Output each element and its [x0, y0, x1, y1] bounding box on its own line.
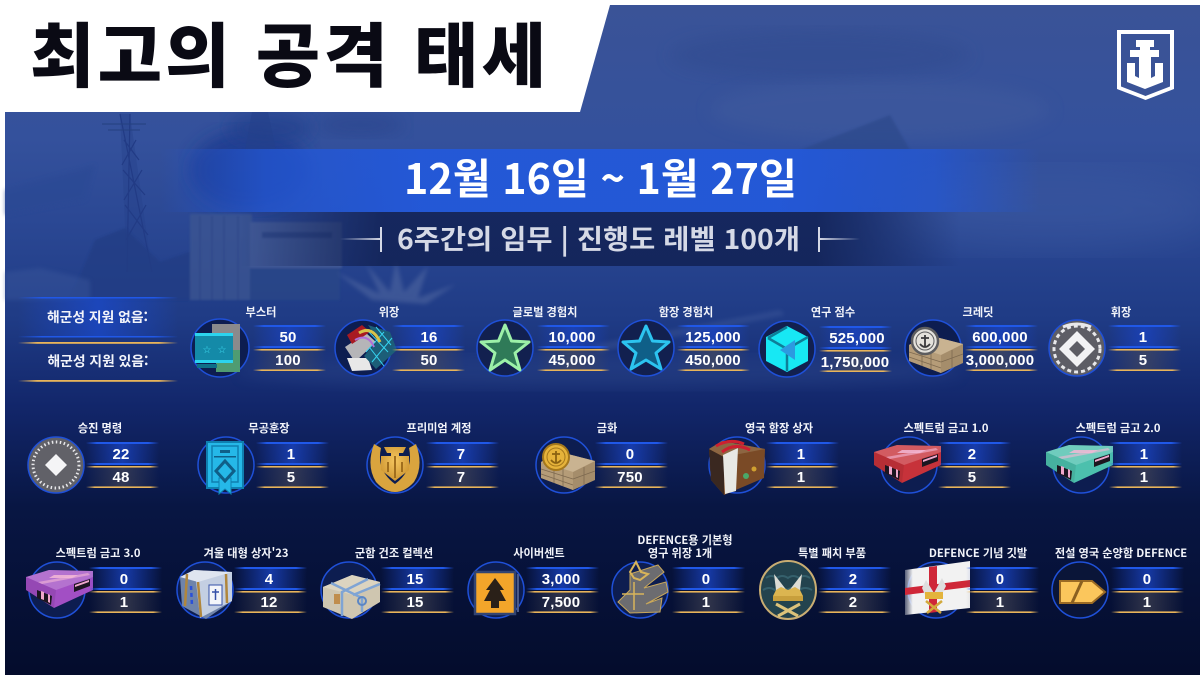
item: booster: [191, 304, 326, 377]
item: research points: 연구 점수: [811, 304, 855, 320]
ship silhouette: [5, 112, 456, 304]
item: camouflage: 16: [420, 329, 438, 346]
item: commendation medal: [198, 420, 329, 494]
item: spectrum container 2.0: 1: [1140, 469, 1148, 486]
item: commendation medal: 5: [287, 469, 295, 486]
item: camouflage: 50: [420, 352, 438, 369]
item: cybercents: 3,000: [542, 571, 580, 588]
item: commendation medal: 1: [287, 446, 295, 463]
item: legendary british cruiser defence: 전설 영국 순양함 DEFENCE: [1055, 545, 1187, 561]
item: commendation medal: 무공훈장: [248, 420, 290, 436]
date banner: [160, 146, 1040, 212]
item: global experience: 45,000: [548, 352, 596, 369]
item: spectrum container 2.0: 1: [1140, 446, 1148, 463]
item: ship experience: 함장 경험치: [659, 304, 713, 320]
item: promotion orders: 22: [112, 446, 130, 463]
item: insignia: 휘장: [1111, 304, 1131, 320]
subtitle banner: [240, 212, 960, 266]
item: premium account: 7: [457, 446, 465, 463]
item: research points: [759, 304, 892, 377]
item: booster: 부스터: [246, 304, 276, 320]
item: ship experience: [618, 304, 750, 376]
item: premium account: 프리미엄 계정: [407, 420, 471, 436]
row legend: without and with admiralty support: [18, 297, 178, 382]
item: large winter container 23: [177, 545, 307, 619]
item: legendary british cruiser defence: 1: [1143, 594, 1151, 611]
item: british ship container: 영국 함장 상자: [745, 420, 814, 436]
item: special patch parts: 특별 패치 부품: [798, 545, 866, 561]
item: special patch parts: [760, 545, 891, 619]
item: cybercents: [468, 545, 599, 618]
item: credits: 600,000: [972, 329, 1028, 346]
subtitle banner: 6주간의 임무 | 진행도 레벨 100개: [397, 218, 800, 257]
item: spectrum container 3.0: 1: [120, 594, 128, 611]
item: camouflage: 위장: [379, 304, 399, 320]
item: basic permanent camouflage for defence: 0: [702, 571, 710, 588]
row legend: without and with admiralty support: 해군성 지원 없음:: [47, 306, 148, 326]
item: promotion orders: [28, 420, 159, 493]
item: global experience: 글로벌 경험치: [513, 304, 577, 320]
item: global experience: [477, 304, 610, 376]
item: legendary british cruiser defence: 0: [1143, 571, 1151, 588]
item: premium account: 7: [457, 469, 465, 486]
item: spectrum container 1.0: 5: [968, 469, 976, 486]
item: booster: ☆: [218, 345, 227, 356]
item: british ship container: 1: [797, 446, 805, 463]
item: basic permanent camouflage for defence: 영구 위장 1개: [648, 545, 712, 561]
item: spectrum container 3.0: [26, 545, 162, 618]
item: promotion orders: 48: [112, 469, 130, 486]
item: special patch parts: 2: [849, 594, 857, 611]
item: spectrum container 2.0: [1046, 420, 1182, 493]
item: spectrum container 2.0: 스펙트럼 금고 2.0: [1076, 420, 1161, 436]
item: british ship container: 1: [797, 469, 805, 486]
item: special patch parts: 2: [849, 571, 857, 588]
item: ship experience: 450,000: [685, 352, 741, 369]
item: fleet construction collection: 군함 건조 컬렉션: [355, 545, 433, 561]
item: fleet construction collection: 15: [406, 571, 424, 588]
item: large winter container 23: 4: [265, 571, 274, 588]
logo: anchor shield: [1117, 30, 1174, 100]
item: cybercents: 7,500: [542, 594, 580, 611]
item: basic permanent camouflage for defence: [612, 532, 745, 618]
item: cybercents: 사이버센트: [513, 545, 565, 561]
item: basic permanent camouflage for defence: 1: [702, 594, 710, 611]
item: british ship container: [709, 420, 839, 495]
item: spectrum container 3.0: 스펙트럼 금고 3.0: [56, 545, 141, 561]
item: credits: [905, 304, 1038, 376]
row legend: without and with admiralty support: 해군성 지원 있음:: [47, 350, 149, 370]
item: doubloons: 750: [617, 469, 643, 486]
title banner: 최고의 공격 태세: [30, 1, 546, 102]
item: large winter container 23: 12: [260, 594, 278, 611]
item: doubloons: 금화: [597, 420, 617, 436]
item: spectrum container 1.0: 2: [968, 446, 976, 463]
item: defence commemorative flag: DEFENCE 기념 깃발: [929, 545, 1027, 561]
item: basic permanent camouflage for defence: DEFENCE용 기본형: [637, 532, 733, 548]
item: spectrum container 1.0: 스펙트럼 금고 1.0: [904, 420, 989, 436]
item: insignia: 5: [1139, 352, 1147, 369]
item: booster: ☆: [203, 345, 212, 356]
item: fleet construction collection: 15: [406, 594, 424, 611]
item: promotion orders: 승진 명령: [78, 420, 122, 436]
item: premium account: [367, 420, 499, 493]
date banner: 12월 16일 ~ 1월 27일: [404, 146, 797, 207]
item: spectrum container 3.0: 0: [120, 571, 128, 588]
item: credits: 3,000,000: [966, 352, 1034, 369]
item: insignia: 1: [1139, 329, 1147, 346]
item: doubloons: 0: [626, 446, 634, 463]
item: ship experience: 125,000: [685, 329, 741, 346]
item: defence commemorative flag: 0: [996, 571, 1004, 588]
item: research points: 525,000: [829, 330, 885, 347]
item: defence commemorative flag: [905, 545, 1039, 618]
item: doubloons: [536, 420, 668, 493]
item: credits: 크레딧: [963, 304, 993, 320]
item: camouflage: [335, 304, 465, 376]
item: global experience: 10,000: [548, 329, 596, 346]
item: legendary british cruiser defence: [1052, 545, 1187, 618]
item: fleet construction collection: [321, 545, 454, 619]
item: research points: 1,750,000: [821, 354, 889, 371]
item: large winter container 23: 겨울 대형 상자'23: [204, 545, 288, 561]
item: booster: 100: [275, 352, 301, 369]
item: booster: 50: [279, 329, 297, 346]
item: spectrum container 1.0: [874, 420, 1011, 493]
item: insignia: [1049, 304, 1181, 376]
item: defence commemorative flag: 1: [996, 594, 1004, 611]
